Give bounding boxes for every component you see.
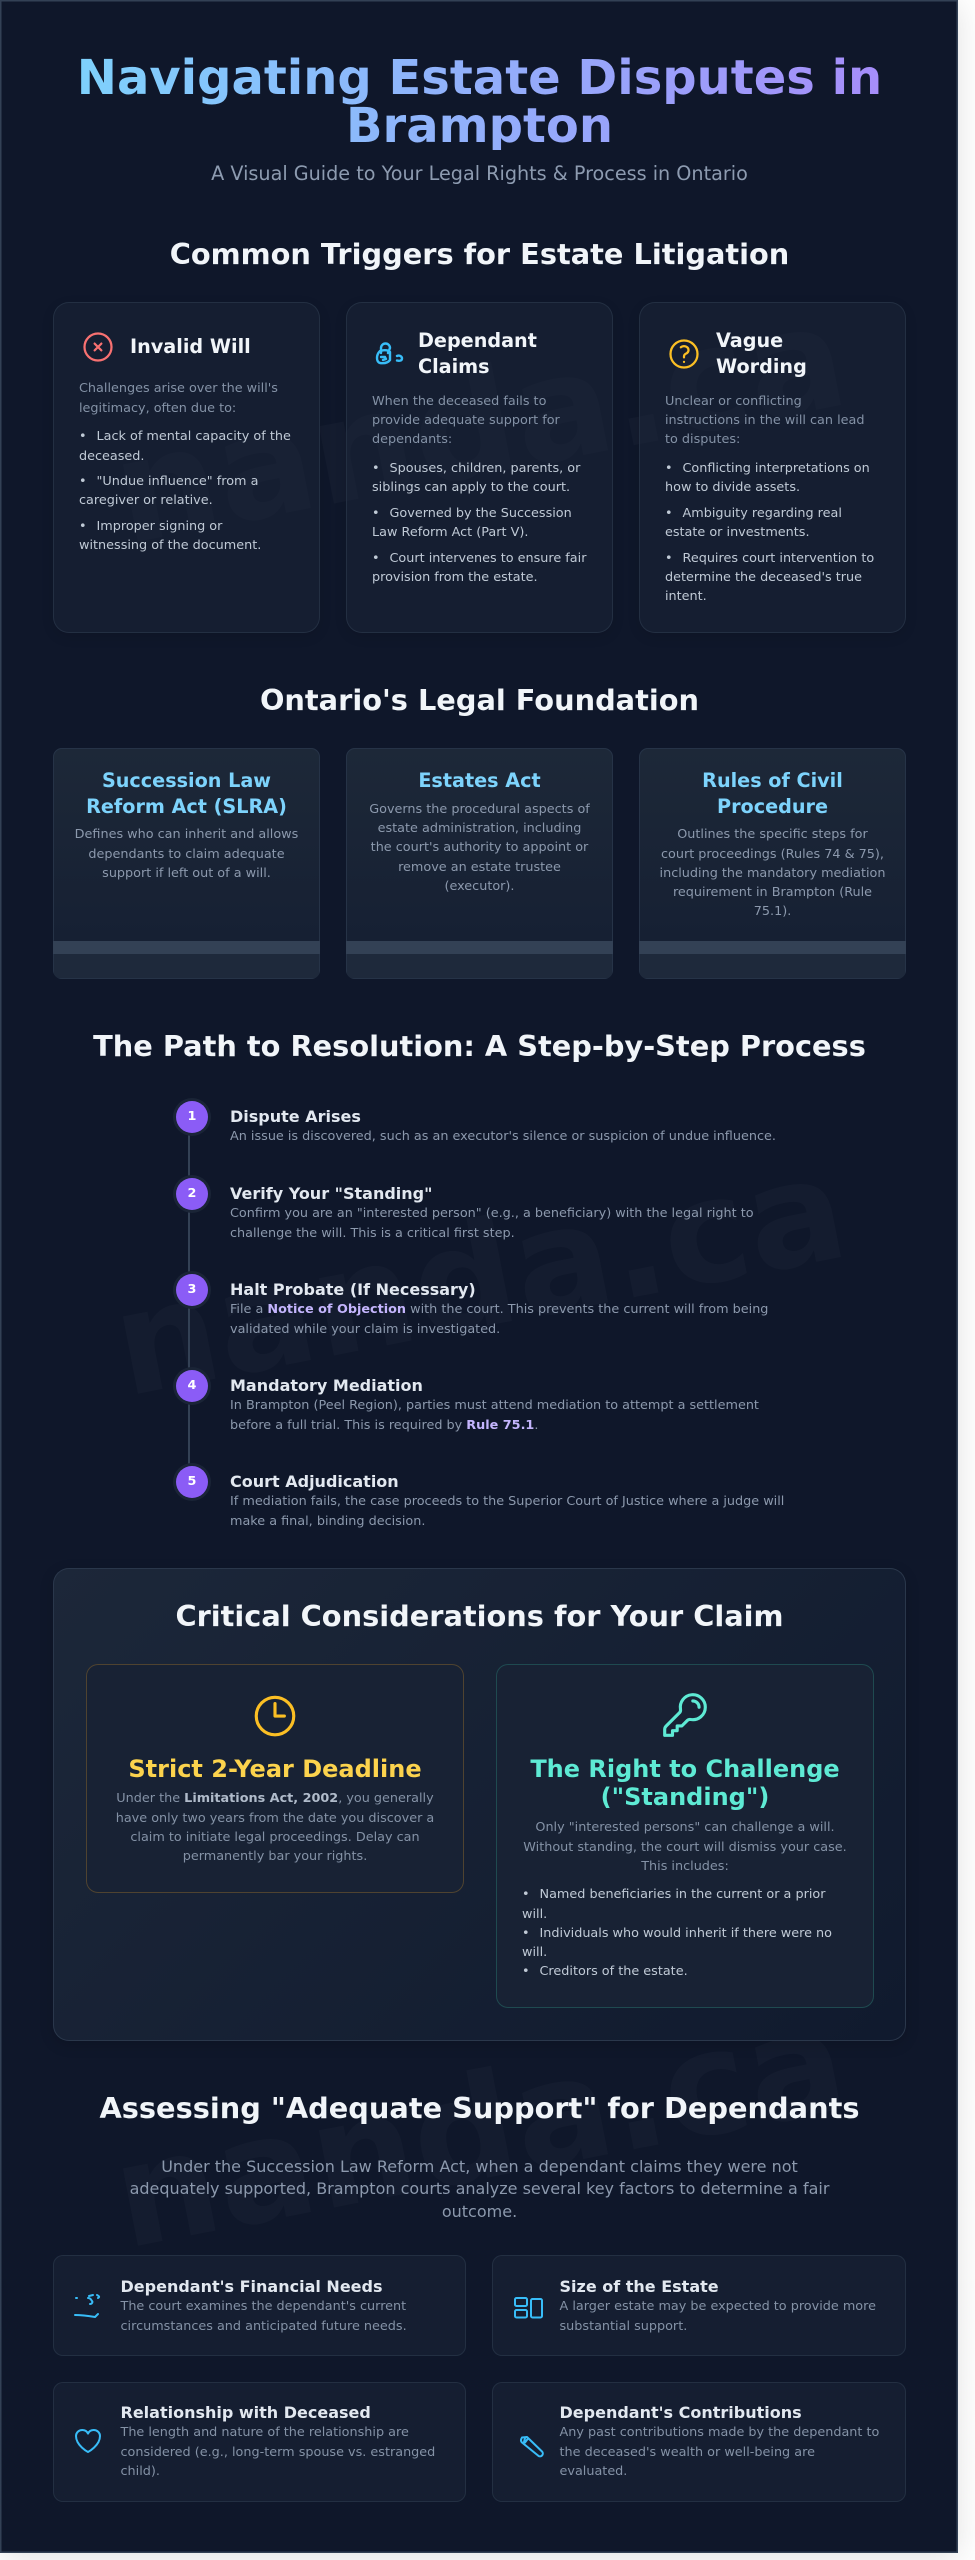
panel: dependant claims (346, 302, 613, 633)
title: Brampton (346, 98, 613, 154)
card text: Court intervenes to ensure fair (390, 551, 586, 566)
card title (418, 329, 537, 378)
title (53, 54, 906, 150)
box text: Without standing, the court will dismiss your case. (523, 1840, 847, 1855)
intro paragraph: adequately supported, Brampton courts analyze several key factors to determine a fair (130, 2179, 829, 2198)
act description (369, 802, 590, 894)
box text (523, 1820, 847, 1874)
factor text: circumstances and anticipated future needs. (120, 2319, 407, 2334)
card text: Spouses, children, parents, or (390, 461, 580, 476)
card text: siblings can apply to the court. (372, 480, 570, 495)
act title: Reform Act (SLRA) (86, 795, 287, 818)
panel: rules of civil procedure (639, 748, 906, 979)
act description: the court's authority to appoint or (371, 840, 588, 855)
box list: Named beneficiaries in the current or a prior (540, 1887, 825, 1902)
step title: Verify Your "Standing" (230, 1184, 432, 1203)
text: nanda.ca (100, 1123, 859, 1429)
act description: 75.1). (754, 904, 791, 919)
step number: 4 (188, 1378, 196, 1393)
card text: Governed by the Succession (390, 506, 572, 521)
act title: Procedure (717, 795, 828, 818)
step number: 5 (188, 1474, 196, 1489)
act description: Governs the procedural aspects of (369, 802, 590, 817)
card text: Ambiguity regarding real (682, 506, 842, 521)
act description (660, 827, 885, 919)
box text: claim to initiate legal proceedings. Delay can (130, 1830, 420, 1845)
card text: • (665, 551, 673, 566)
box text: have only two years from the date you discover a (116, 1811, 434, 1826)
card text: • (79, 519, 87, 534)
act title (702, 769, 843, 818)
step text: challenge the will. This is a critical first step. (230, 1226, 515, 1241)
box text: Under the Limitations Act, 2002, you generally (116, 1791, 434, 1806)
step text (230, 1398, 759, 1433)
box list: Creditors of the estate. (540, 1964, 688, 1979)
heading: path to resolution: The Path to Resolution: A Step-by-Step Process (93, 1029, 866, 1063)
card text: determine the deceased's true (665, 570, 862, 585)
box: deadline (86, 1664, 464, 1893)
factor text: the deceased's wealth or well-being are (560, 2445, 815, 2460)
step text: before a full trial. This is required by Rule 75.1. (230, 1418, 538, 1433)
icon: broken link (376, 342, 404, 364)
factor text: The court examines the dependant's current (120, 2299, 406, 2314)
factor text (560, 2299, 876, 2334)
box text (116, 1791, 434, 1864)
card text: • (372, 506, 380, 521)
card text: Unclear or conflicting (665, 394, 802, 409)
card text: provide adequate support for (372, 413, 560, 428)
box list: • (522, 1887, 530, 1902)
card text: instructions in the will can lead (665, 413, 864, 428)
factor text (120, 2299, 407, 2334)
box: standing (496, 1664, 874, 2008)
icon: key (663, 1693, 707, 1737)
act description: requirement in Brampton (Rule (673, 885, 872, 900)
step 4 (173, 1367, 759, 1433)
card text: Improper signing or (96, 519, 222, 534)
card text: When the deceased fails to (372, 394, 546, 409)
card text: • (372, 551, 380, 566)
card text: estate or investments. (665, 525, 810, 540)
step title: Halt Probate (If Necessary) (230, 1280, 476, 1299)
step text: validated while your claim is investigated. (230, 1322, 500, 1337)
icon: layout (514, 2297, 543, 2318)
card text: "Undue influence" from a (96, 474, 258, 489)
panel: vague wording (639, 302, 906, 633)
card title: Wording (716, 355, 807, 378)
box list: will. (522, 1907, 547, 1922)
factor text: A larger estate may be expected to provide more (560, 2299, 876, 2314)
intro paragraph: outcome. (442, 2202, 517, 2221)
heading: adequate support: Assessing "Adequate Support" for Dependants (99, 2091, 860, 2125)
card text: to disputes: (665, 432, 740, 447)
factor title: Relationship with Deceased (120, 2403, 371, 2422)
act description: support if left out of a will. (102, 866, 271, 881)
intro paragraph (130, 2157, 830, 2221)
card title (716, 329, 807, 378)
timeline connector (188, 1120, 190, 1470)
box title (530, 1755, 840, 1811)
step 5 (173, 1463, 784, 1529)
icon: x circle (83, 332, 113, 362)
icon: clock (254, 1696, 296, 1736)
factor text: considered (e.g., long-term spouse vs. estranged (120, 2445, 435, 2460)
step title: Court Adjudication (230, 1472, 399, 1491)
act description: court proceedings (Rules 74 & 75), (661, 847, 884, 862)
factor title: Dependant's Financial Needs (120, 2277, 382, 2296)
box title: Strict 2-Year Deadline (128, 1755, 422, 1783)
panel: estates act (346, 748, 613, 979)
factor text: substantial support. (560, 2319, 687, 2334)
icon: pill (520, 2436, 544, 2458)
card text: caregiver or relative. (79, 493, 213, 508)
icon: heart (75, 2429, 101, 2453)
step number (176, 1274, 208, 1306)
step text (230, 1302, 768, 1337)
step text: An issue is discovered, such as an executor's silence or suspicion of undue influence. (230, 1129, 776, 1144)
step text: make a final, binding decision. (230, 1514, 425, 1529)
box text: Only "interested persons" can challenge a will. (535, 1820, 835, 1835)
card text (79, 381, 291, 553)
card text: Conflicting interpretations on (682, 461, 870, 476)
step text: If mediation fails, the case proceeds to the Superior Court of Justice where a judge will (230, 1494, 784, 1509)
act description: Defines who can inherit and allows (75, 827, 298, 842)
card text: intent. (665, 589, 707, 604)
card text: Law Reform Act (Part V). (372, 525, 528, 540)
box list: • (522, 1926, 530, 1941)
card text: • (665, 461, 673, 476)
factor text (560, 2425, 879, 2479)
act description: remove an estate trustee (398, 860, 561, 875)
card title: Claims (418, 355, 490, 378)
step number (176, 1178, 208, 1210)
card text: dependants: (372, 432, 452, 447)
card text: deceased. (79, 449, 144, 464)
factor: size of estate (492, 2255, 906, 2356)
box title: ("Standing") (601, 1783, 769, 1811)
card text: • (79, 429, 87, 444)
card text: provision from the estate. (372, 570, 538, 585)
factor: relationship (53, 2382, 466, 2502)
text: nanda.ca (100, 271, 859, 577)
act description: Outlines the specific steps for (677, 827, 868, 842)
step 2 (173, 1175, 754, 1241)
heading: critical considerations: Critical Considerations for Your Claim (175, 1599, 784, 1633)
icon: question circle (669, 339, 699, 369)
step title: Mandatory Mediation (230, 1376, 423, 1395)
icon: financial (74, 2294, 100, 2318)
factor text: The length and nature of the relationship are (120, 2425, 409, 2440)
factor: contributions (492, 2382, 906, 2502)
card text (665, 394, 874, 604)
box list: will. (522, 1945, 547, 1960)
factor: financial needs (53, 2255, 466, 2356)
act description (75, 827, 298, 881)
text: nanda.ca (100, 1975, 859, 2281)
factor text (120, 2425, 435, 2479)
step number: 2 (188, 1186, 196, 1201)
factor title: Dependant's Contributions (560, 2403, 802, 2422)
intro paragraph: Under the Succession Law Reform Act, when a dependant claims they were not (161, 2157, 798, 2176)
act description: dependants to claim adequate (88, 847, 285, 862)
factor text: child). (120, 2464, 160, 2479)
step number: 3 (188, 1282, 196, 1297)
card text: witnessing of the document. (79, 538, 261, 553)
act title (86, 769, 287, 818)
card text (372, 394, 586, 585)
act title: Rules of Civil (702, 769, 843, 792)
card text: • (79, 474, 87, 489)
panel: invalid will (53, 302, 320, 633)
factor text: Any past contributions made by the dependant to (560, 2425, 879, 2440)
card text: how to divide assets. (665, 480, 800, 495)
act title: Estates Act (418, 769, 541, 792)
step number: 1 (188, 1109, 196, 1124)
step number (176, 1466, 208, 1498)
heading: legal foundation: Ontario's Legal Foundation (260, 683, 699, 717)
card title: Dependant (418, 329, 537, 352)
box text: This includes: (641, 1859, 729, 1874)
factor text: evaluated. (560, 2464, 627, 2479)
step text (230, 1494, 784, 1529)
act title: Succession Law (102, 769, 271, 792)
act description: estate administration, including (378, 821, 581, 836)
step 3 (173, 1271, 768, 1337)
panel: critical considerations (53, 1568, 906, 2041)
card text: legitimacy, often due to: (79, 401, 236, 416)
card text: Lack of mental capacity of the (96, 429, 291, 444)
card title: Invalid Will (130, 335, 251, 358)
step number (176, 1370, 208, 1402)
step 1 (173, 1098, 776, 1144)
box list: • (522, 1964, 530, 1979)
box title: The Right to Challenge (530, 1755, 840, 1783)
card text: Challenges arise over the will's (79, 381, 278, 396)
card text: • (665, 506, 673, 521)
step number (176, 1101, 208, 1133)
factor title: Size of the Estate (560, 2277, 719, 2296)
step title: Dispute Arises (230, 1107, 361, 1126)
step text (230, 1206, 754, 1241)
subtitle: A Visual Guide to Your Legal Rights & Process in Ontario (211, 162, 748, 185)
heading: common triggers: Common Triggers for Estate Litigation (170, 237, 789, 271)
act description: including the mandatory mediation (660, 866, 885, 881)
card text: Requires court intervention to (682, 551, 874, 566)
step text: File a Notice of Objection with the court. This prevents the current will from being (230, 1302, 768, 1317)
title: Navigating Estate Disputes in (77, 50, 882, 106)
step text: Confirm you are an "interested person" (e.g., a beneficiary) with the legal right to (230, 1206, 754, 1221)
box list: Individuals who would inherit if there were no (540, 1926, 832, 1941)
box list (522, 1887, 832, 1979)
panel: SLRA (53, 748, 320, 979)
step text: In Brampton (Peel Region), parties must attend mediation to attempt a settlement (230, 1398, 759, 1413)
box text: permanently bar your rights. (183, 1849, 367, 1864)
card title: Vague (716, 329, 783, 352)
card text: • (372, 461, 380, 476)
act description: (executor). (444, 879, 514, 894)
